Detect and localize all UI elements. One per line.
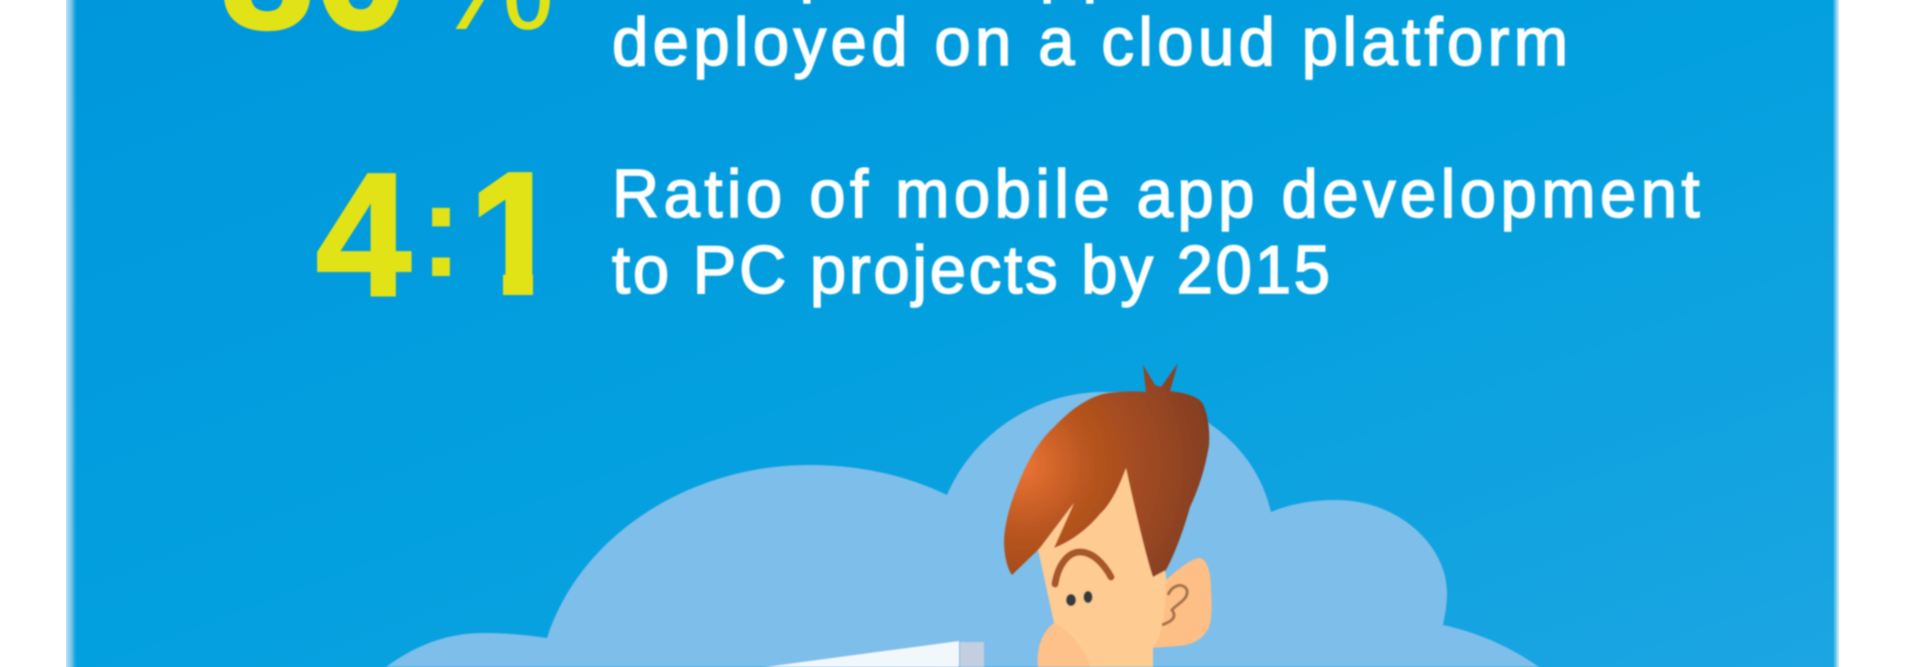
ear xyxy=(1150,558,1212,648)
ear detail xyxy=(1162,585,1187,625)
nose xyxy=(1038,623,1090,667)
illustration: character head xyxy=(1004,363,1212,667)
big number: 4 to 1 ratio: : xyxy=(420,154,462,305)
stat description: ratio: to PC projects by 2015 xyxy=(612,233,1330,308)
eyes xyxy=(1066,591,1092,606)
big number: 4 to 1 ratio xyxy=(316,171,534,298)
illustration: cloud xyxy=(386,392,1539,667)
eyebrow xyxy=(1055,552,1111,584)
big number: 80 percent xyxy=(220,0,555,66)
stat description: cloud deployment: deployed on a cloud platform xyxy=(612,5,1568,80)
stat: mobile to PC ratio xyxy=(316,166,1701,309)
illustration: laptop lid xyxy=(765,641,984,667)
big number: 4 to 1 ratio: 1 xyxy=(470,138,560,333)
stat description: ratio xyxy=(612,157,1700,308)
hair xyxy=(1004,363,1209,577)
stat description: ratio: Ratio of mobile app development xyxy=(612,157,1700,232)
big number: 4 to 1 ratio: 4 xyxy=(316,138,411,333)
face xyxy=(1037,460,1166,667)
stat: cloud deployment share xyxy=(220,0,1568,80)
